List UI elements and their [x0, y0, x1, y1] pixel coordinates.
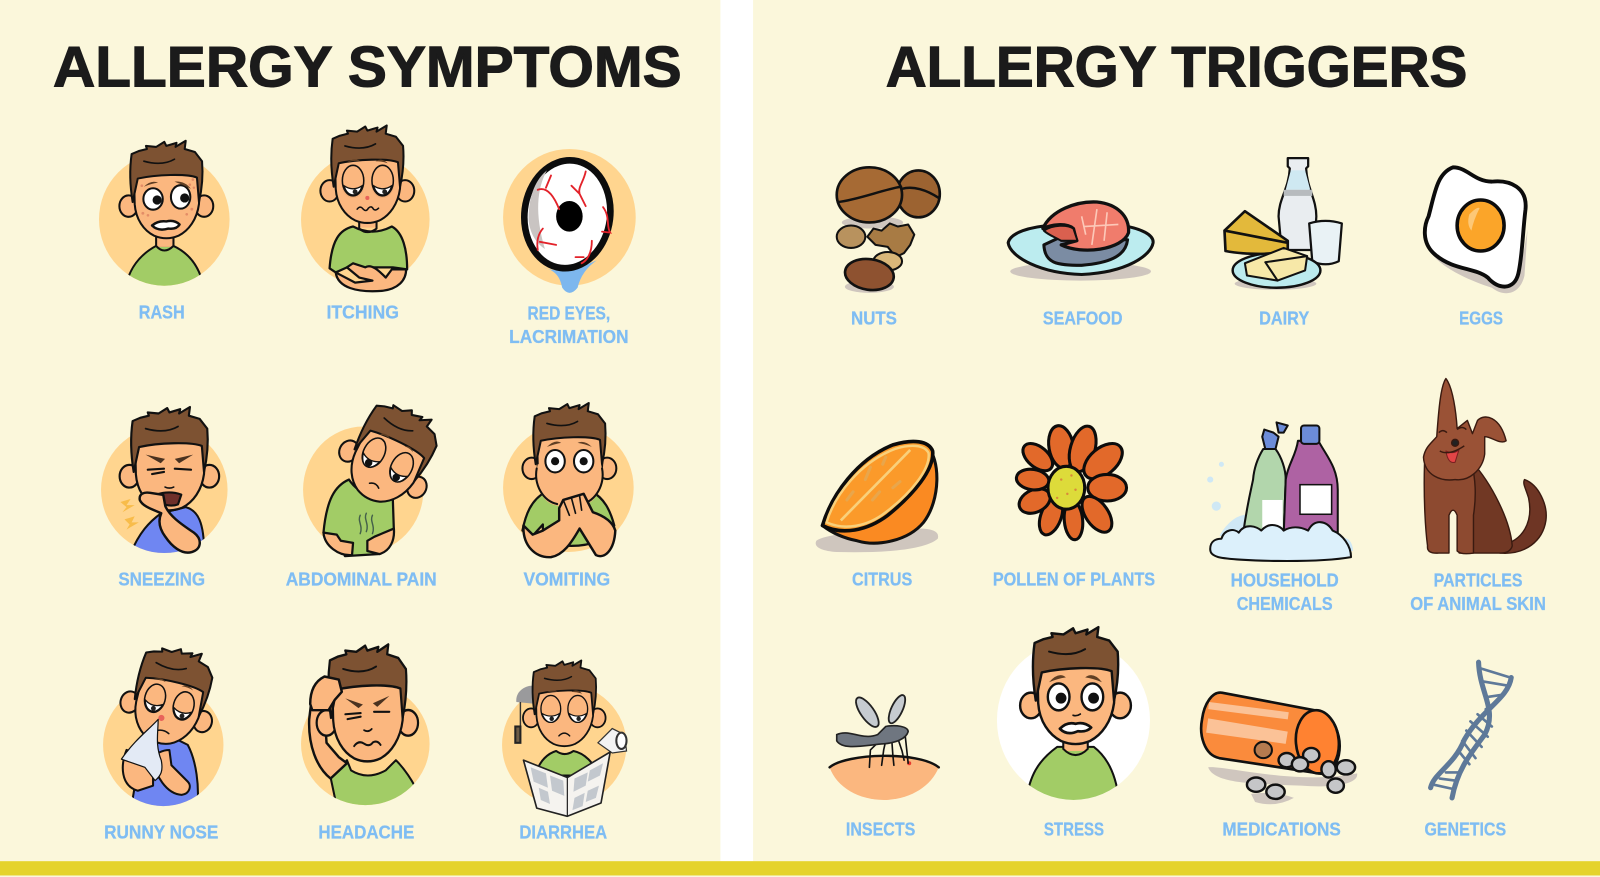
trigger: medications — [1201, 693, 1357, 840]
trigger: eggs — [1425, 167, 1528, 328]
label: insects: INSECTS — [846, 819, 915, 840]
icon: toilet chain — [515, 686, 537, 743]
trigger: particles of animal skin — [1410, 379, 1546, 614]
trigger: citrus — [816, 441, 938, 590]
footer bar — [0, 861, 1600, 875]
title: allergy symptoms: ALLERGY SYMPTOMS — [53, 36, 682, 100]
icon: glass of milk — [1309, 221, 1342, 264]
symptom: headache — [301, 644, 430, 843]
icon: green bottle — [1243, 422, 1288, 536]
label: household chemicals — [1231, 570, 1339, 614]
icon: tear drop — [543, 260, 597, 293]
label: citrus: CITRUS — [852, 569, 912, 590]
trigger: household chemicals — [1207, 422, 1353, 614]
label: abdominal pain: ABDOMINAL PAIN — [286, 569, 437, 590]
icon: purple bottle — [1284, 425, 1338, 536]
icon: milk bottle — [1279, 158, 1316, 250]
icon: hand on hair — [310, 676, 342, 710]
symptom: red eyes, lacrimation — [503, 149, 636, 347]
icon: newspaper — [523, 752, 610, 816]
icon: bloodshot eye — [518, 155, 616, 273]
symptom: abdominal pain — [286, 388, 456, 590]
label: particles of animal skin: OF ANIMAL SKIN — [1410, 593, 1546, 614]
trigger: dairy — [1224, 158, 1342, 328]
panel: allergy triggers — [816, 36, 1546, 840]
label: household chemicals: CHEMICALS — [1237, 593, 1333, 614]
icon: mosquito — [837, 693, 908, 767]
label: vomiting: VOMITING — [523, 569, 610, 590]
label: diarrhea: DIARRHEA — [519, 822, 607, 843]
label: medications: MEDICATIONS — [1222, 819, 1341, 840]
label: particles of animal skin — [1410, 570, 1546, 614]
icon: skin patch — [830, 756, 939, 800]
label: red eyes, lacrimation — [509, 302, 629, 347]
symptom: sneezing — [101, 407, 228, 590]
label: itching: ITCHING — [327, 301, 399, 322]
symptom: vomiting — [503, 403, 634, 590]
icon: dog — [1423, 379, 1546, 554]
label: stress: STRESS — [1044, 819, 1104, 840]
title: allergy triggers: ALLERGY TRIGGERS — [886, 36, 1467, 100]
label: household chemicals: HOUSEHOLD — [1231, 570, 1339, 591]
trigger: nuts — [837, 167, 940, 328]
label: red eyes, lacrimation: LACRIMATION — [509, 326, 629, 347]
label: eggs: EGGS — [1459, 307, 1503, 328]
label: sneezing: SNEEZING — [118, 569, 205, 590]
icon: pill bottle — [1201, 693, 1341, 775]
trigger: seafood — [1008, 202, 1153, 328]
symptom: rash — [99, 141, 230, 322]
icon: toilet paper roll — [598, 729, 627, 753]
panel: allergy symptoms — [53, 36, 682, 843]
trigger: genetics — [1424, 662, 1511, 840]
trigger: stress — [997, 627, 1150, 840]
label: seafood: SEAFOOD — [1043, 307, 1122, 328]
icon: plate with butter — [1233, 248, 1320, 288]
symptom: itching — [301, 126, 430, 322]
label: headache: HEADACHE — [318, 822, 414, 843]
label: red eyes, lacrimation: RED EYES, — [528, 302, 610, 323]
label: dairy: DAIRY — [1259, 307, 1310, 328]
icon: tissue — [121, 719, 162, 781]
symptom: runny nose — [103, 647, 224, 839]
label: runny nose: RUNNY NOSE — [104, 822, 218, 843]
label: genetics: GENETICS — [1424, 819, 1506, 840]
icon: cheese wedge — [1224, 211, 1288, 255]
icon: foam — [1210, 522, 1351, 561]
icon: raised arm — [309, 694, 347, 779]
icon: sneezing arm — [140, 493, 200, 553]
symptom: diarrhea — [502, 660, 627, 843]
label: particles of animal skin: PARTICLES — [1434, 570, 1522, 591]
trigger: insects — [830, 693, 939, 840]
icon: pills — [1247, 748, 1355, 799]
label: pollen of plants: POLLEN OF PLANTS — [993, 569, 1155, 590]
label: rash: RASH — [139, 301, 185, 322]
label: nuts: NUTS — [851, 307, 897, 328]
trigger: pollen of plants — [993, 423, 1155, 590]
